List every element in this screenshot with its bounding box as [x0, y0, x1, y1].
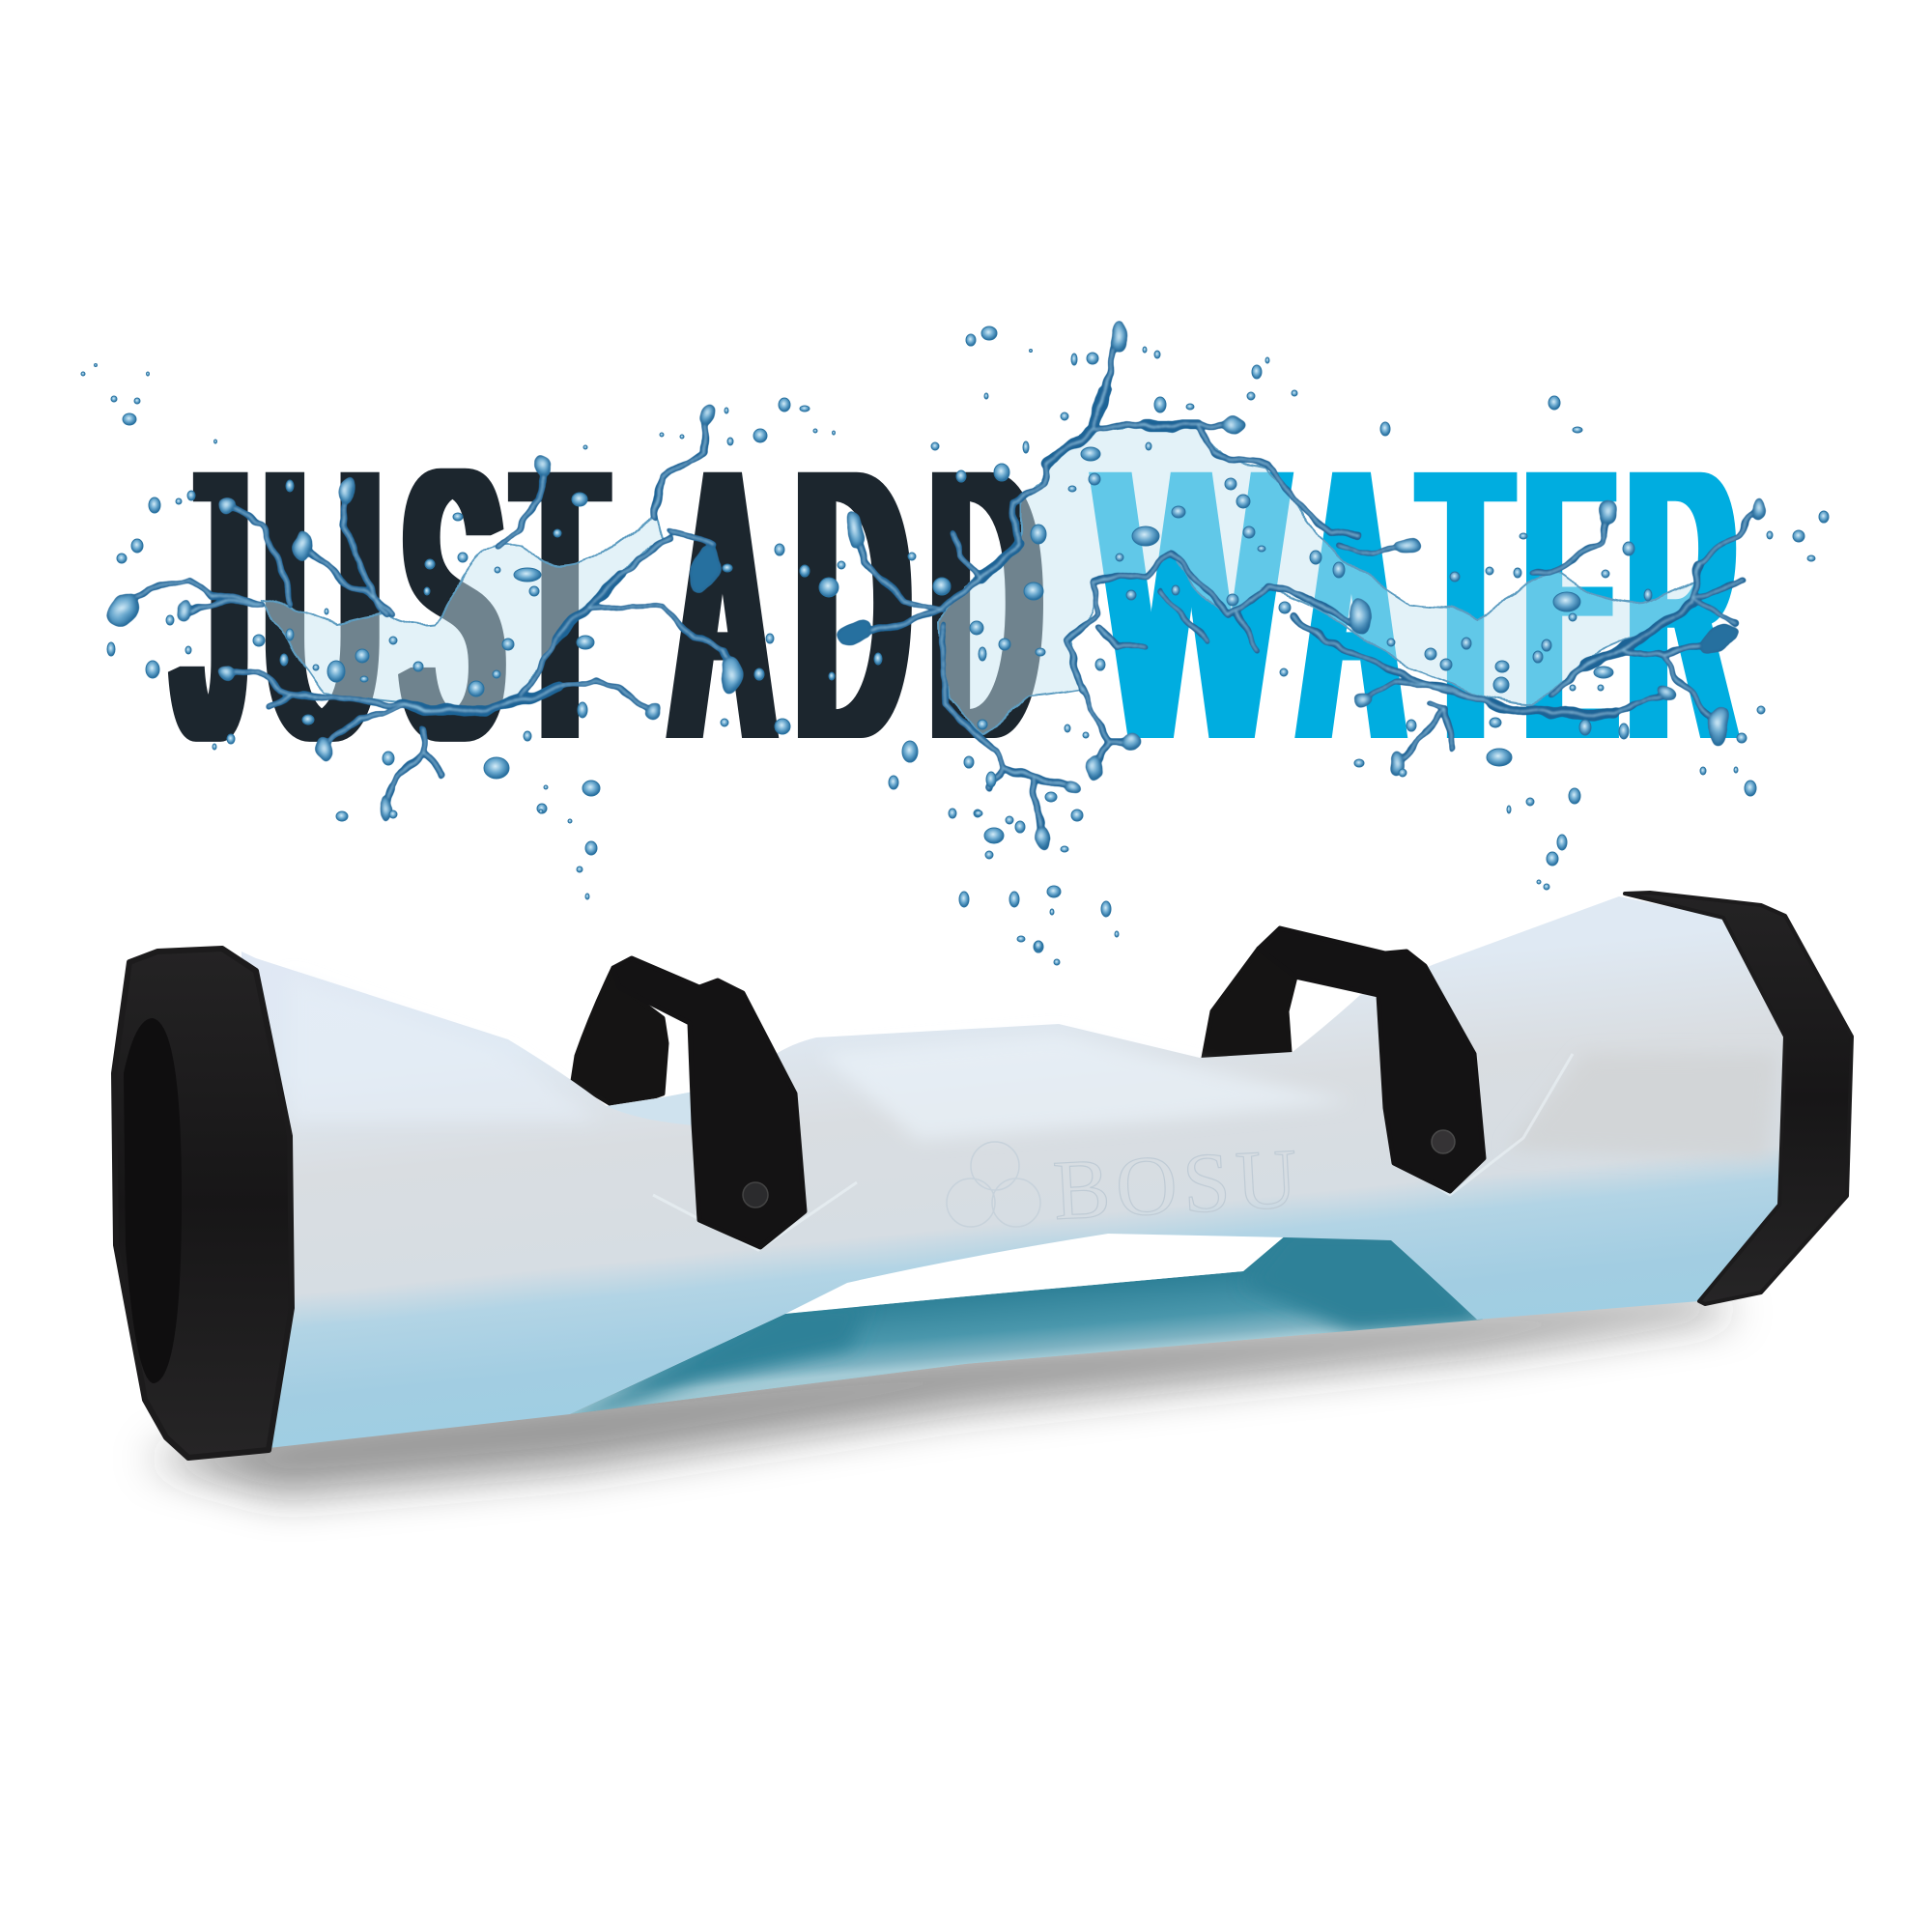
right handle	[1259, 928, 1484, 1191]
right handle screw	[1432, 1130, 1455, 1153]
infographic canvas	[81, 321, 1854, 1524]
heading word: JUST ADD: T	[517, 387, 604, 820]
water splash: translucent sheets	[262, 423, 1693, 733]
left handle screw	[743, 1182, 768, 1208]
water splash: strands and blobs	[104, 323, 1764, 850]
heading word: JUST ADD: S	[404, 389, 500, 821]
heading word: WATER: A	[1306, 389, 1397, 821]
dark strand layer	[114, 335, 1758, 838]
heading word: WATER: E	[1528, 390, 1612, 821]
left end cap	[114, 949, 292, 1458]
heading word: JUST ADD: J	[178, 388, 245, 820]
floor shadow	[145, 1294, 1739, 1495]
strands	[114, 335, 1758, 838]
heading word: JUST ADD: D	[932, 389, 1038, 821]
water droplets	[81, 327, 1829, 965]
blobs	[104, 323, 1764, 850]
rod shaded ends	[571, 1237, 1483, 1414]
heading word: JUST ADD: U	[266, 387, 380, 820]
left handle	[613, 958, 805, 1247]
heading word: WATER: T	[1423, 388, 1508, 820]
saddle light patch	[607, 1092, 694, 1125]
heading word: WATER	[1100, 388, 1735, 821]
heading word: WATER: R	[1630, 389, 1735, 821]
heading word: JUST ADD: D	[798, 389, 907, 821]
left handle back leg	[573, 968, 667, 1109]
main body shell	[242, 896, 1785, 1449]
right handle back leg	[1204, 949, 1295, 1065]
embossed logo mark	[947, 1142, 1040, 1227]
heading word: JUST ADD: A	[678, 389, 768, 821]
strand highlight layer	[114, 335, 1758, 838]
product: BOSU water-filled weight bar	[114, 893, 1852, 1495]
lower rod	[571, 1236, 1483, 1414]
body facet highlights	[290, 976, 1777, 1159]
thick rim segments	[398, 390, 1693, 715]
heading word: JUST ADD	[178, 387, 1038, 821]
heading word: WATER: W	[1100, 390, 1284, 821]
left cap opening	[124, 1018, 182, 1383]
moulded ridge lines	[653, 1054, 1573, 1250]
right end cap	[1625, 893, 1852, 1304]
headline: JUST ADD WATER	[178, 387, 1735, 821]
embossed BOSU wordmark: BOSU	[1051, 1132, 1305, 1238]
